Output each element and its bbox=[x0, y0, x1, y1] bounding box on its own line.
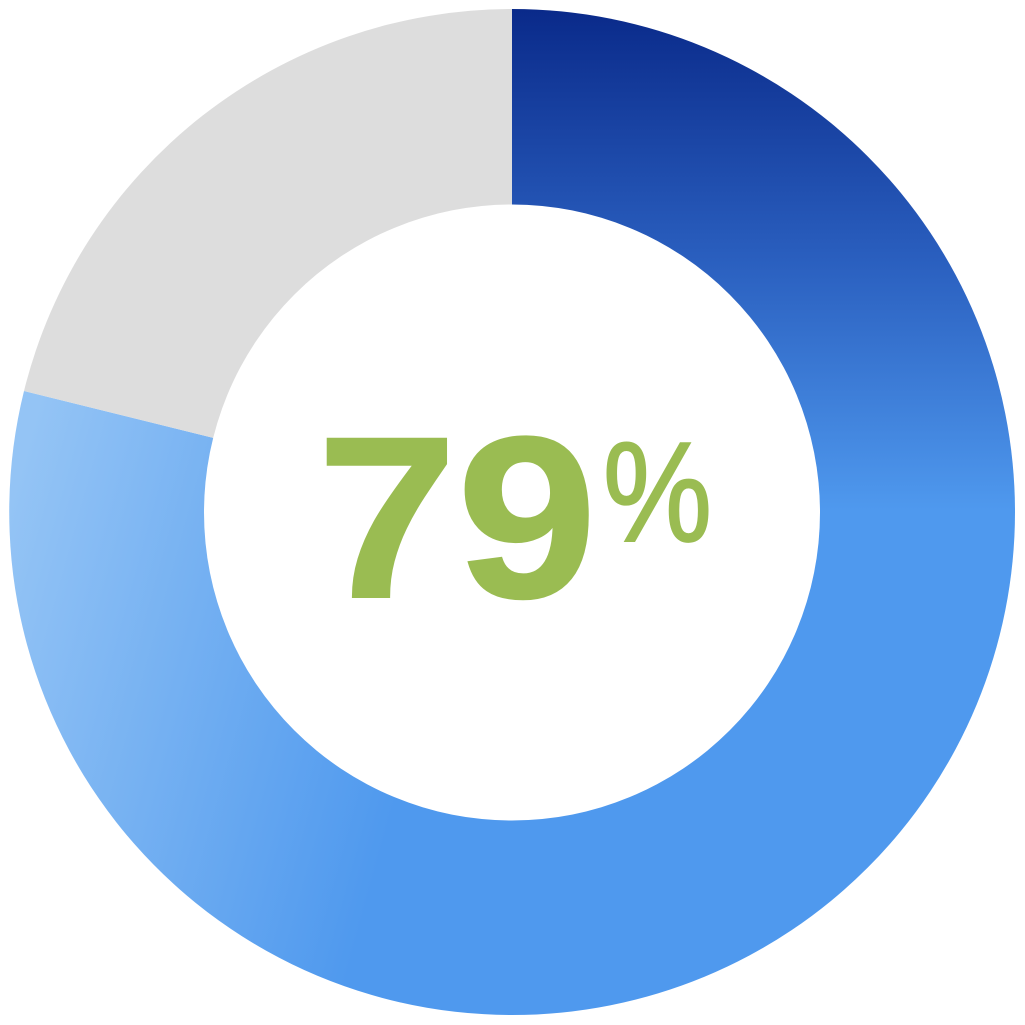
center value: 79%: 79 bbox=[317, 389, 597, 646]
ring segment: grey remainder bbox=[24, 9, 512, 512]
donut hole bbox=[204, 204, 820, 820]
ring segment: blue gradient arc from top to lower right bbox=[512, 9, 1015, 1015]
center value: 79%: % bbox=[603, 413, 712, 572]
center value: 79% bbox=[317, 389, 712, 646]
ring segment: light blue gradient arc lower left bbox=[9, 391, 512, 1015]
